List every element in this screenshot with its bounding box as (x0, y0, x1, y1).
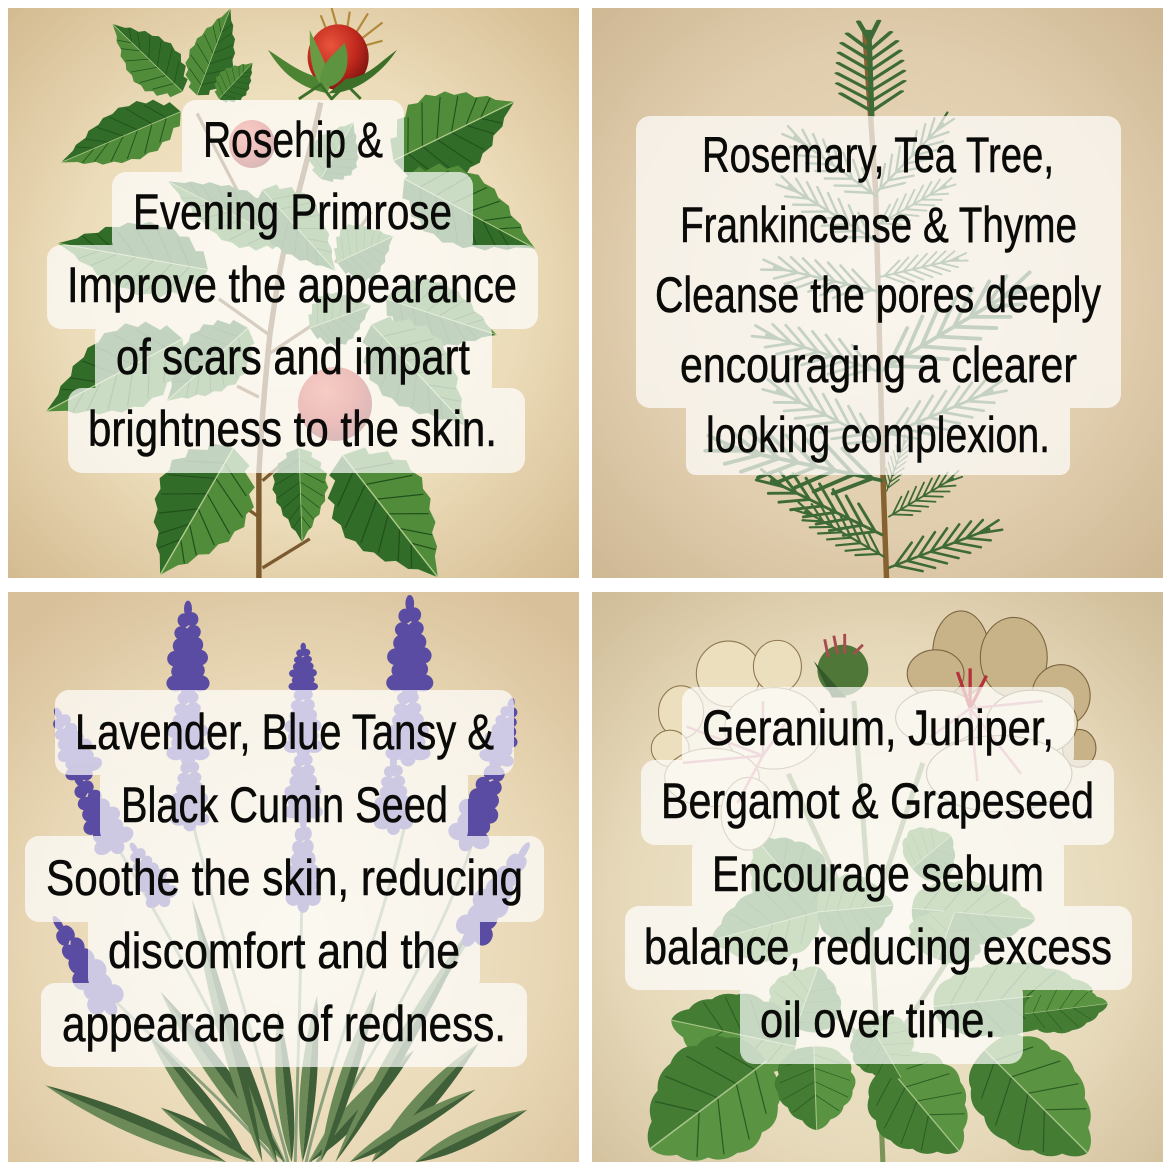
panel: rosemary, tea tree, frankincense and thyme (592, 8, 1163, 584)
panel: geranium, juniper, bergamot and grapeseed (592, 592, 1163, 1170)
panel background (8, 592, 579, 1162)
panel background (8, 8, 579, 578)
text block: appearance of redness. (62, 996, 506, 1052)
panel: lavender, blue tansy and black cumin seed (8, 592, 579, 1170)
icon: geranium flower right (896, 611, 1096, 812)
illustration: geranium leaves and stems (614, 701, 1125, 1170)
text block: Rosehip & (203, 112, 383, 168)
text highlight boxes (47, 100, 538, 473)
text block (644, 700, 1112, 1048)
panel background (592, 592, 1163, 1162)
text block (46, 704, 523, 1052)
text block: Evening Primrose (133, 184, 452, 240)
icon: flower bud (814, 634, 868, 697)
illustration: rosemary sprig (702, 20, 1046, 584)
text block: discomfort and the (108, 923, 460, 979)
text block: Rosemary, Tea Tree, (702, 127, 1054, 183)
text block (655, 127, 1101, 463)
icon: rosehip fruit left (229, 120, 275, 168)
text block: looking complexion. (706, 407, 1050, 463)
text highlight boxes (25, 690, 544, 1067)
text block: encouraging a clearer (680, 337, 1077, 393)
text block: Soothe the skin, reducing (46, 850, 523, 906)
text block: Encourage sebum (712, 846, 1044, 902)
illustration: lavender stems and blades (37, 595, 546, 1170)
text highlight boxes (636, 116, 1121, 475)
panel: rosehip and evening primrose (8, 0, 579, 607)
text block: Black Cumin Seed (121, 777, 448, 833)
text block: Improve the appearance (67, 257, 517, 313)
text block: of scars and impart (116, 329, 470, 385)
text block: Geranium, Juniper, (702, 700, 1054, 756)
illustration: rosehip plant (46, 8, 536, 578)
text block: brightness to the skin. (88, 401, 497, 457)
icon: rosehip fruit top (268, 8, 397, 99)
text block (67, 112, 517, 457)
text block: Lavender, Blue Tansy & (75, 704, 494, 760)
icon: rosehip fruit middle (298, 367, 372, 441)
panel background (592, 8, 1163, 578)
text block: oil over time. (760, 992, 996, 1048)
text highlight boxes (625, 687, 1132, 1064)
icon: geranium flower left (651, 640, 823, 850)
